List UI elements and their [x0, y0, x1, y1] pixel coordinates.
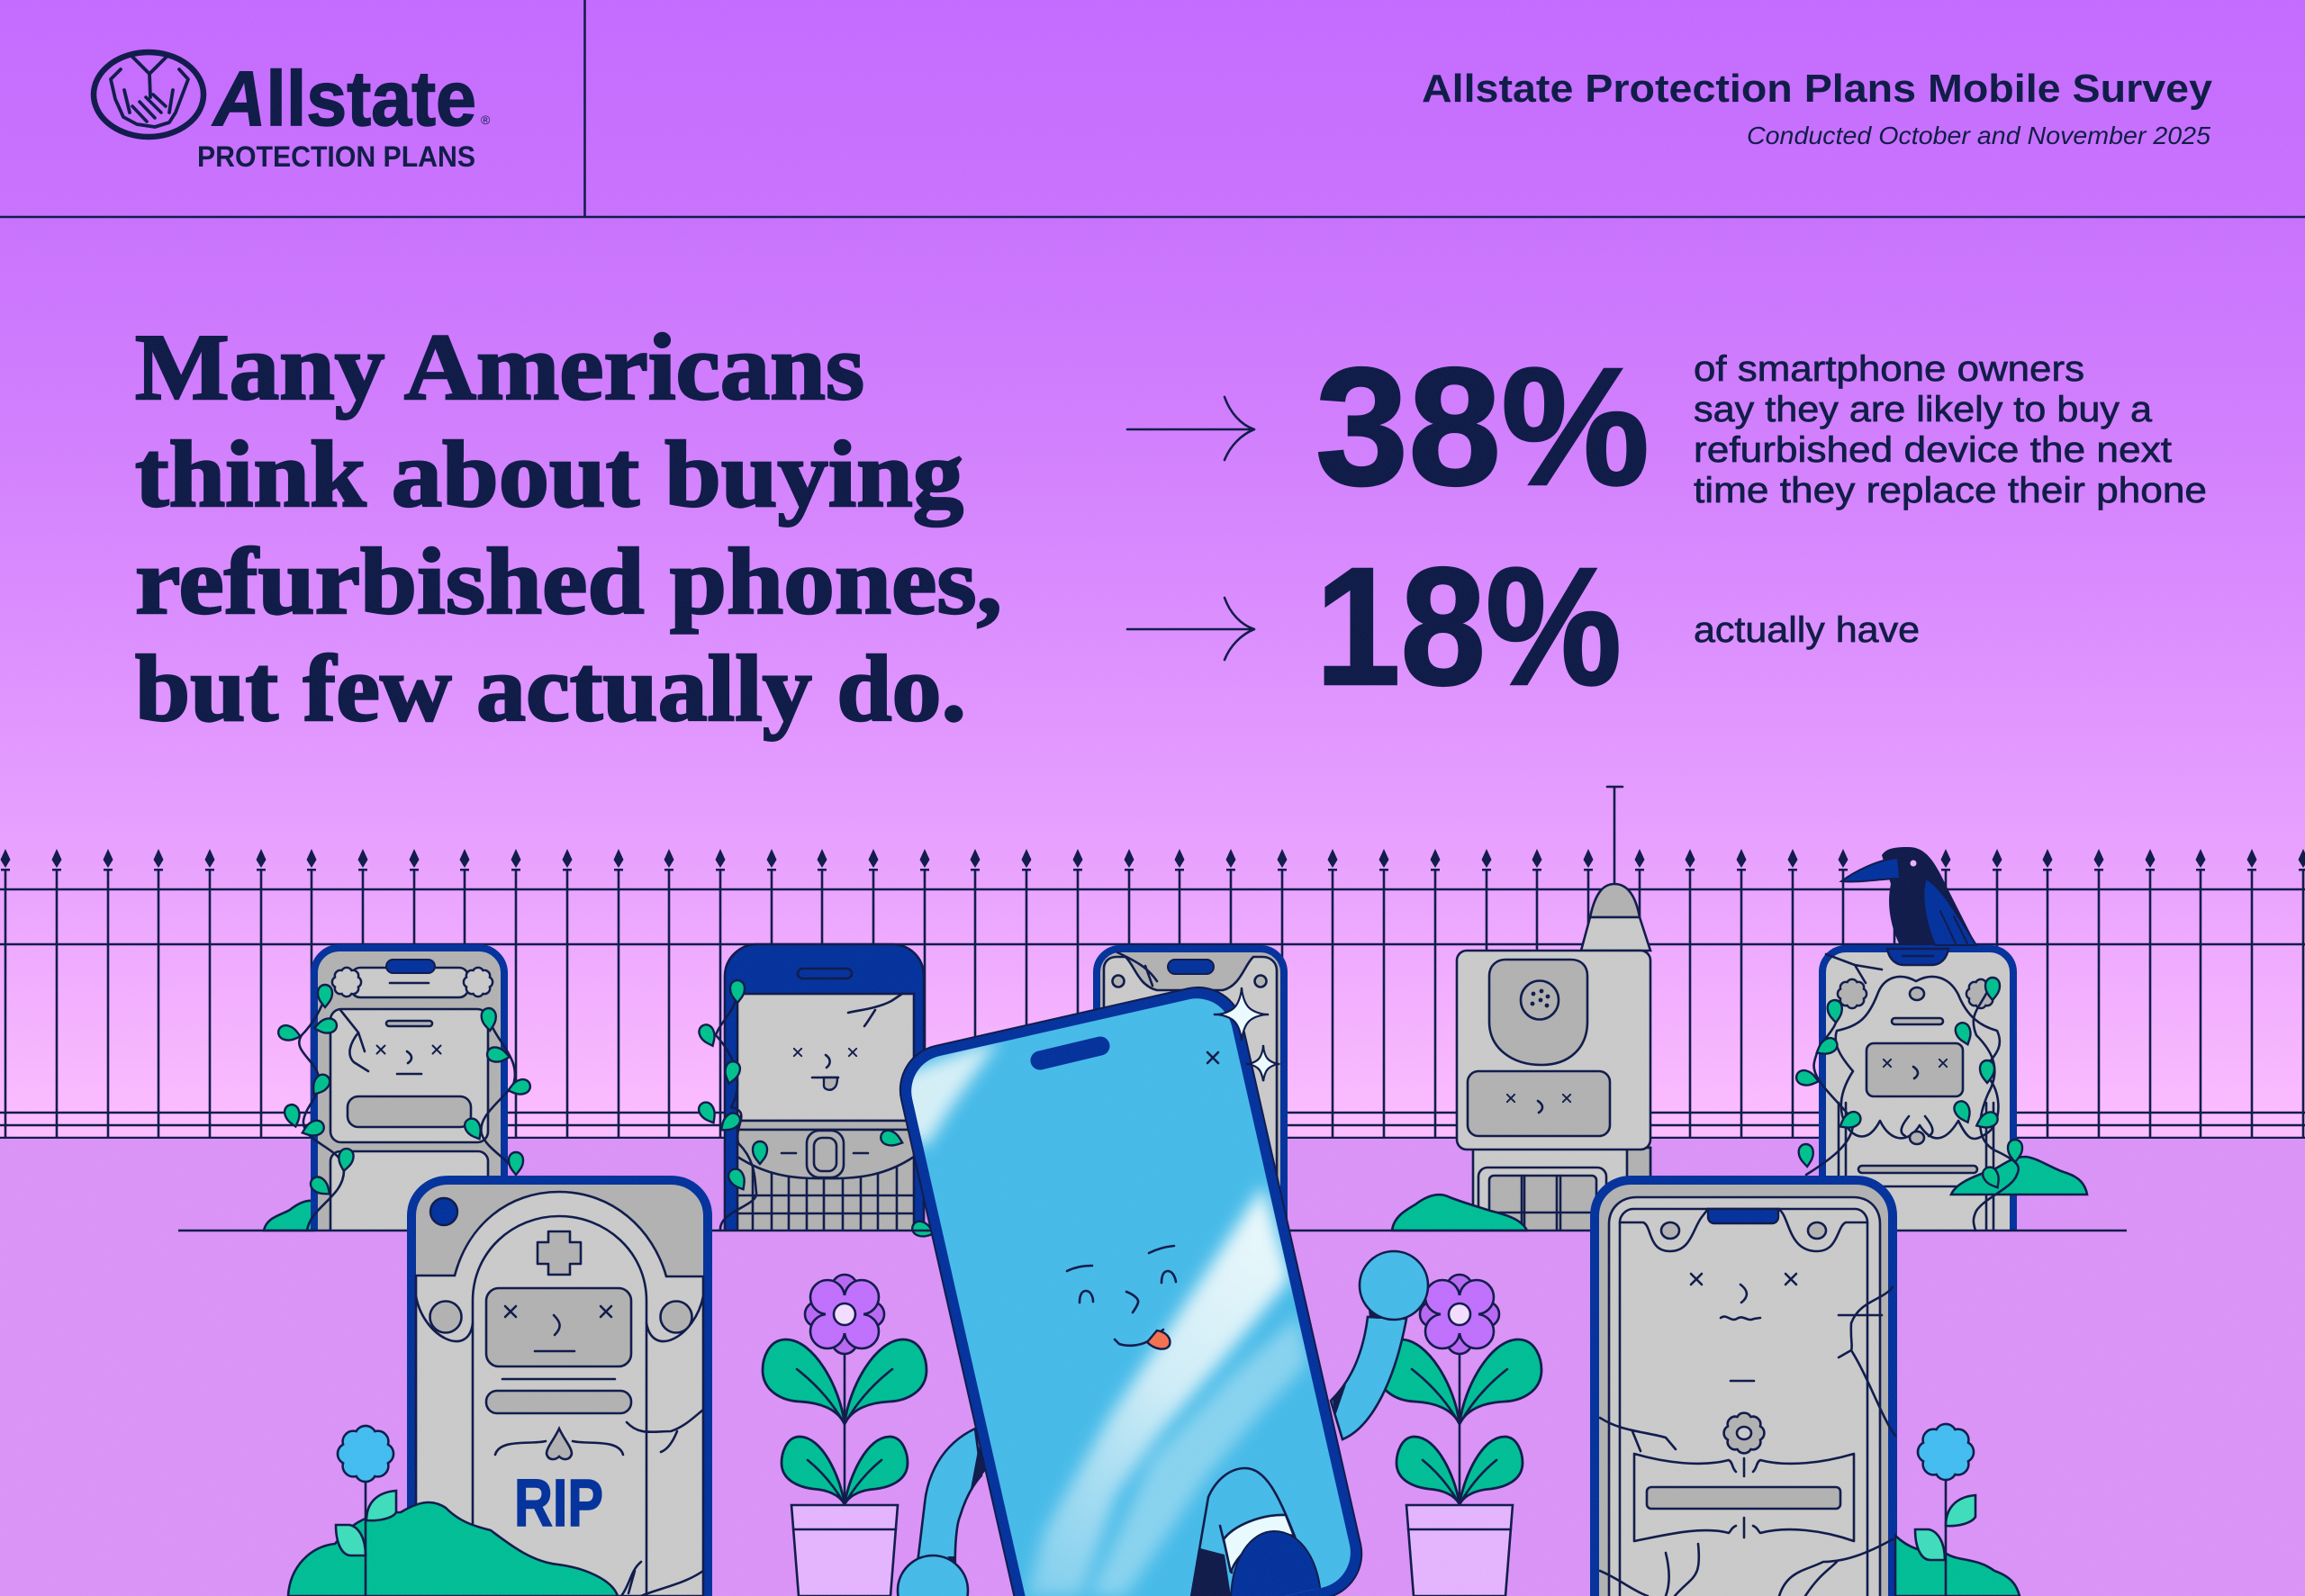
upper body [1457, 951, 1650, 1150]
front phone gravestone right [1595, 1180, 1895, 1596]
stat text: 38% description: refurbished device the next [1694, 430, 2172, 470]
RIP text: RIP [514, 1465, 603, 1540]
antenna [1607, 787, 1623, 884]
speaker pill [1040, 1046, 1100, 1060]
leg and shoe [1190, 1468, 1321, 1596]
header subtitle: Conducted October and November 2025 [1747, 122, 2210, 149]
headline: think about buying [135, 421, 963, 527]
face screen [486, 1288, 631, 1366]
stat text: 38% description: say they are likely to buy a [1694, 390, 2153, 429]
potted flower right [1378, 1275, 1541, 1596]
ornate phone gravestone with crow [1822, 949, 2013, 1255]
camera [430, 1198, 457, 1225]
cracked phone gravestone: back centre [1097, 949, 1284, 1255]
bush beside ornate phone [1951, 1157, 2087, 1195]
bush and blue flower, bottom right [1895, 1424, 2020, 1596]
cemetery fence [0, 849, 2305, 1139]
right arm [1331, 1251, 1428, 1439]
header title: Allstate Protection Plans Mobile Survey [1422, 67, 2213, 111]
ornament [495, 1441, 623, 1455]
arrow 2 [1127, 598, 1254, 660]
headline: Many Americans [135, 314, 864, 419]
keypad phone gravestone [725, 944, 924, 1242]
vines on ornate phone [1794, 978, 2022, 1231]
stat text: 38% description: time they replace their phone [1694, 471, 2207, 510]
brick phone gravestone [1457, 787, 1650, 1249]
stat text: 18% description: actually have [1694, 610, 1920, 650]
phone body [891, 978, 1370, 1596]
cracks [627, 1410, 703, 1452]
face [1067, 1246, 1176, 1349]
lower body [1471, 1147, 1651, 1205]
stat: 38%: 38% [1315, 334, 1650, 520]
sparkles [1215, 988, 1279, 1081]
baseline of back row [178, 1230, 2127, 1231]
bush beside brick phone [1392, 1195, 1527, 1231]
wordmark: Allstate [212, 56, 476, 142]
screen glare [896, 1040, 1307, 1596]
logo: Allstate Protection Plans [94, 52, 491, 173]
stat text: 38% description: of smartphone owners [1694, 349, 2084, 389]
hero phone character [891, 978, 1428, 1596]
phone screen [904, 991, 1358, 1596]
vines on back left phone [276, 985, 532, 1231]
potted flower left [763, 1275, 927, 1596]
stat text: 38% description [1694, 349, 2207, 510]
icon: good hands [94, 52, 203, 137]
sky background [0, 0, 2305, 1140]
ground [0, 1139, 2305, 1596]
registered mark: ® [481, 113, 491, 127]
bush and blue flower, bottom left [288, 1426, 618, 1596]
left arm [898, 1429, 987, 1596]
headline: but few actually do. [135, 636, 966, 741]
bush behind left phone [264, 1201, 313, 1231]
front gravestone phone: RIP [411, 1180, 708, 1596]
crow [1841, 847, 1976, 945]
vines on keypad phone [696, 980, 936, 1240]
sub wordmark: PROTECTION PLANS [197, 140, 475, 173]
header rule lines [0, 0, 2305, 217]
stat: 18%: 18% [1315, 534, 1622, 720]
old phone gravestone: back left [314, 948, 504, 1254]
arrow 1 [1127, 397, 1254, 460]
cross [538, 1231, 581, 1275]
headline: refurbished phones, [135, 528, 1002, 634]
headline [135, 314, 1002, 741]
